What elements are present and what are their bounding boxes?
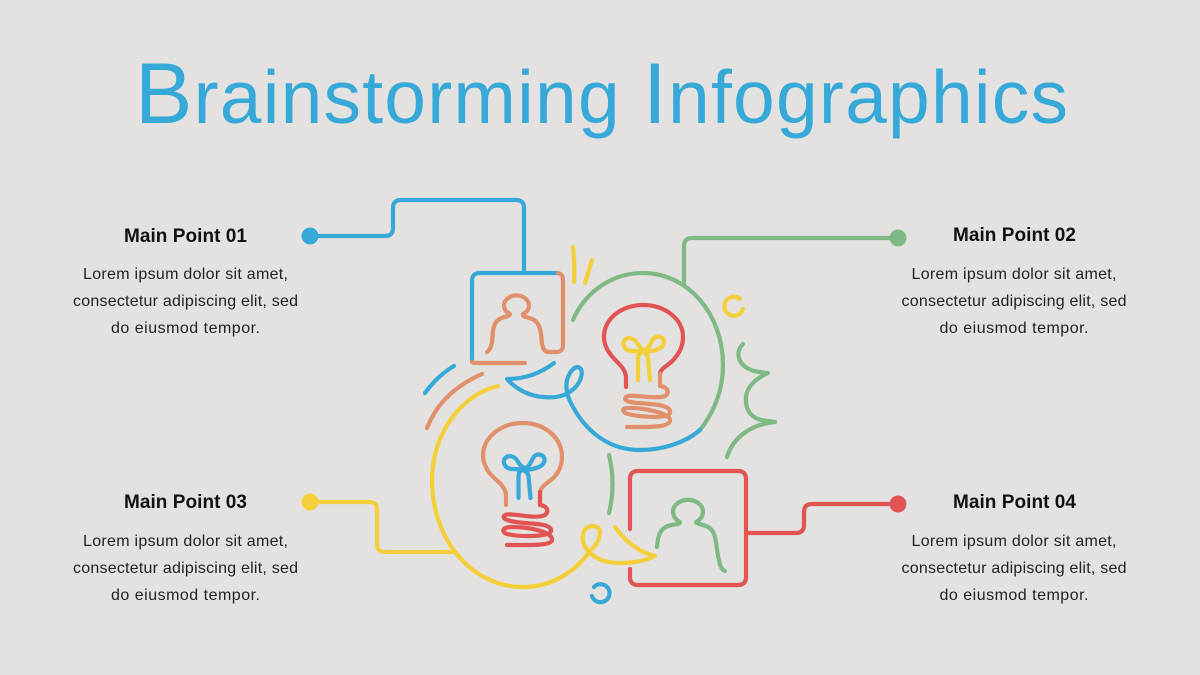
decoration: arcs left [425, 366, 482, 428]
connector: red to Main Point 04 [746, 496, 906, 533]
icon: person in frame, top left [472, 273, 563, 363]
text block: Main Point 01: Main Point 01 [124, 226, 247, 247]
decoration: yellow ring [724, 297, 743, 316]
text block: Main Point 04: do eiusmod tempor. [940, 587, 1088, 604]
text block: Main Point 04: Lorem ipsum dolor sit amet, [912, 533, 1116, 550]
text block: Main Point 04: Main Point 04 [953, 492, 1076, 513]
text block: Main Point 04 [902, 492, 1126, 604]
text block: Main Point 04: consectetur adipiscing elit, sed [902, 560, 1126, 577]
text block: Main Point 02 [902, 225, 1126, 337]
text block: Main Point 01: consectetur adipiscing elit, sed [73, 293, 298, 310]
title: Brainstorming Infographics [135, 46, 1068, 142]
text block: Main Point 02: Lorem ipsum dolor sit amet, [912, 266, 1116, 283]
connector: yellow to Main Point 03 [302, 494, 452, 552]
connector: blue to Main Point 01 [302, 200, 524, 272]
text block: Main Point 02: do eiusmod tempor. [940, 320, 1088, 337]
text block: Main Point 01: do eiusmod tempor. [111, 320, 260, 337]
text block: Main Point 03 [73, 492, 298, 604]
icon: person in frame, bottom right [630, 471, 746, 585]
decoration: green burst [727, 344, 775, 457]
connector: green to Main Point 02 [684, 230, 906, 285]
text block: Main Point 03: consectetur adipiscing elit, sed [73, 560, 298, 577]
text block: Main Point 01 [73, 226, 298, 337]
decoration: yellow spark lines [573, 247, 592, 283]
text block: Main Point 03: Lorem ipsum dolor sit amet, [83, 533, 288, 550]
text block: Main Point 02: Main Point 02 [953, 225, 1076, 246]
icon: speech bubble circle, bottom left, with light bulb [432, 386, 655, 587]
decoration: blue ring [592, 584, 610, 602]
text block: Main Point 03: Main Point 03 [124, 492, 247, 513]
text block: Main Point 03: do eiusmod tempor. [111, 587, 260, 604]
icon: bulb outline, orange [483, 423, 562, 545]
icon: speech bubble circle, top right, with light bulb [507, 273, 723, 450]
text block: Main Point 01: Lorem ipsum dolor sit amet, [83, 266, 288, 283]
icon: bulb outline, red [604, 305, 683, 427]
text block: Main Point 02: consectetur adipiscing elit, sed [902, 293, 1126, 310]
decoration: green arc [609, 455, 612, 513]
